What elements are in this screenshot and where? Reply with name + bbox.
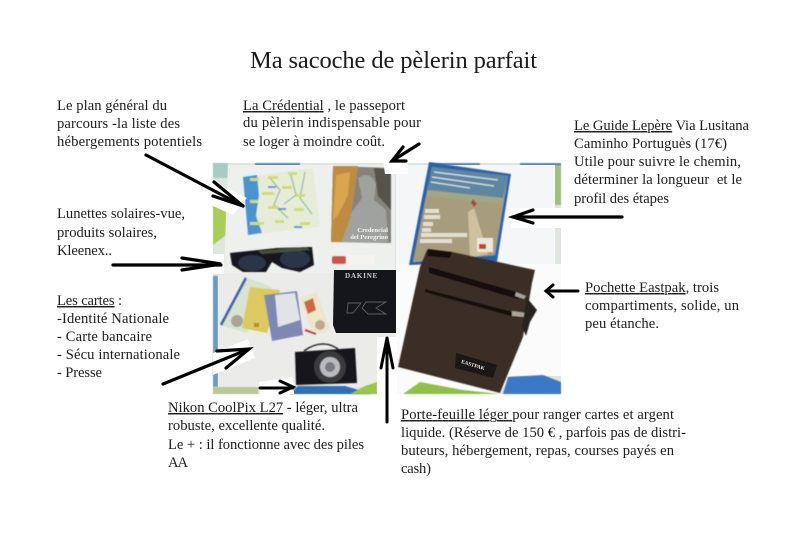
text: Nikon CoolPix L27: robuste, excellente qualité. [168,418,325,434]
text: sunglasses and sun care [57,206,185,259]
text: Pochette Eastpak [585,280,740,332]
book: Credencial del Peregrino: del Peregrino [350,234,389,241]
text: Pochette Eastpak: Pochette Eastpak, trois [585,280,719,296]
text: Nikon CoolPix L27: AA [168,455,188,471]
text: Pochette Eastpak: compartiments, solide, un [585,298,740,314]
white patches behind arrows [213,160,561,394]
sunscreen tube [332,255,375,265]
text: La Crédential: du pèlerin indispensable pour [243,115,421,131]
text: Les cartes: - Sécu internationale [57,347,180,363]
text: Les cartes: - Presse [57,365,102,381]
text: La Crédential: se loger à moindre coût. [243,134,385,150]
text: general route plan: parcours -la liste des [57,116,180,132]
title: Ma sacoche de pèlerin parfait [250,47,537,74]
text: Porte-feuille léger: liquide. (Réserve de 150 € , parfois pas de distri- [401,425,686,441]
arrow: guide book [513,210,622,223]
book: Credencial del Peregrino [331,166,391,243]
text: Nikon CoolPix L27: Nikon CoolPix L27 - léger, ultra [168,400,359,416]
text: sunglasses and sun care: Kleenex.. [57,243,112,259]
camera Nikon [295,344,357,385]
arrow: wallet [381,338,393,422]
text: Le Guide Lepère [574,118,750,207]
arrow: camera [260,381,293,393]
text: sunglasses and sun care: produits solaires, [57,225,157,241]
arrow: Eastpak pouch [546,285,578,297]
arrow: Credential to book [392,144,419,161]
guide book [409,162,511,265]
wallet Dakine: DAKINE [345,272,378,280]
text: Porte-feuille léger: buteurs, hébergement, repas, courses payés en [401,443,675,459]
arrow: plan to map [146,155,243,206]
text: Porte-feuille léger: cash) [401,461,431,477]
text: Le Guide Lepère: Le Guide Lepère Via Lusitana [574,118,750,134]
text: Les cartes [57,293,180,381]
text: general route plan: hébergements potentiels [57,134,202,150]
text: sunglasses and sun care: Lunettes solaires-vue, [57,206,185,222]
ID and bank cards [220,277,330,341]
text: Le Guide Lepère: Utile pour suivre le chemin, [574,154,741,170]
tablecloth background [213,163,561,394]
arrow: sunglasses [113,258,221,270]
text: general route plan: Le plan général du [57,98,168,114]
text: Le Guide Lepère: profil des étapes [574,191,669,207]
Eastpak label [455,353,497,378]
text: general route plan [57,98,202,150]
text: Porte-feuille léger [401,407,686,477]
text: Les cartes: Les cartes : [57,293,122,309]
text: Nikon CoolPix L27: Le + : il fonctionne avec des piles [168,437,364,453]
text: Nikon CoolPix L27 [168,400,364,471]
book: Credencial del Peregrino: Credencial [357,227,388,234]
text: Porte-feuille léger: Porte-feuille léger pour ranger cartes et argent [401,407,674,423]
sunglasses [230,247,314,272]
text: Le Guide Lepère: déterminer la longueur et le [574,172,742,188]
white paper sheets [224,165,395,273]
arrow: cards [163,349,249,384]
photo: contents of the pilgrim's bag [213,162,561,394]
text: Pochette Eastpak: peu étanche. [585,316,659,332]
Eastpak pouch [398,249,537,393]
text: Le Guide Lepère: Caminho Portuguès (17€) [574,136,727,152]
text: La Crédential: La Crédential , le passeport [243,98,405,114]
text: Les cartes: - Carte bancaire [57,329,152,345]
Eastpak label: EASTPAK [460,359,485,372]
text: La Crédential [243,98,421,150]
wallet Dakine [333,270,396,333]
text: Les cartes: -Identité Nationale [57,311,169,327]
map [243,168,320,235]
